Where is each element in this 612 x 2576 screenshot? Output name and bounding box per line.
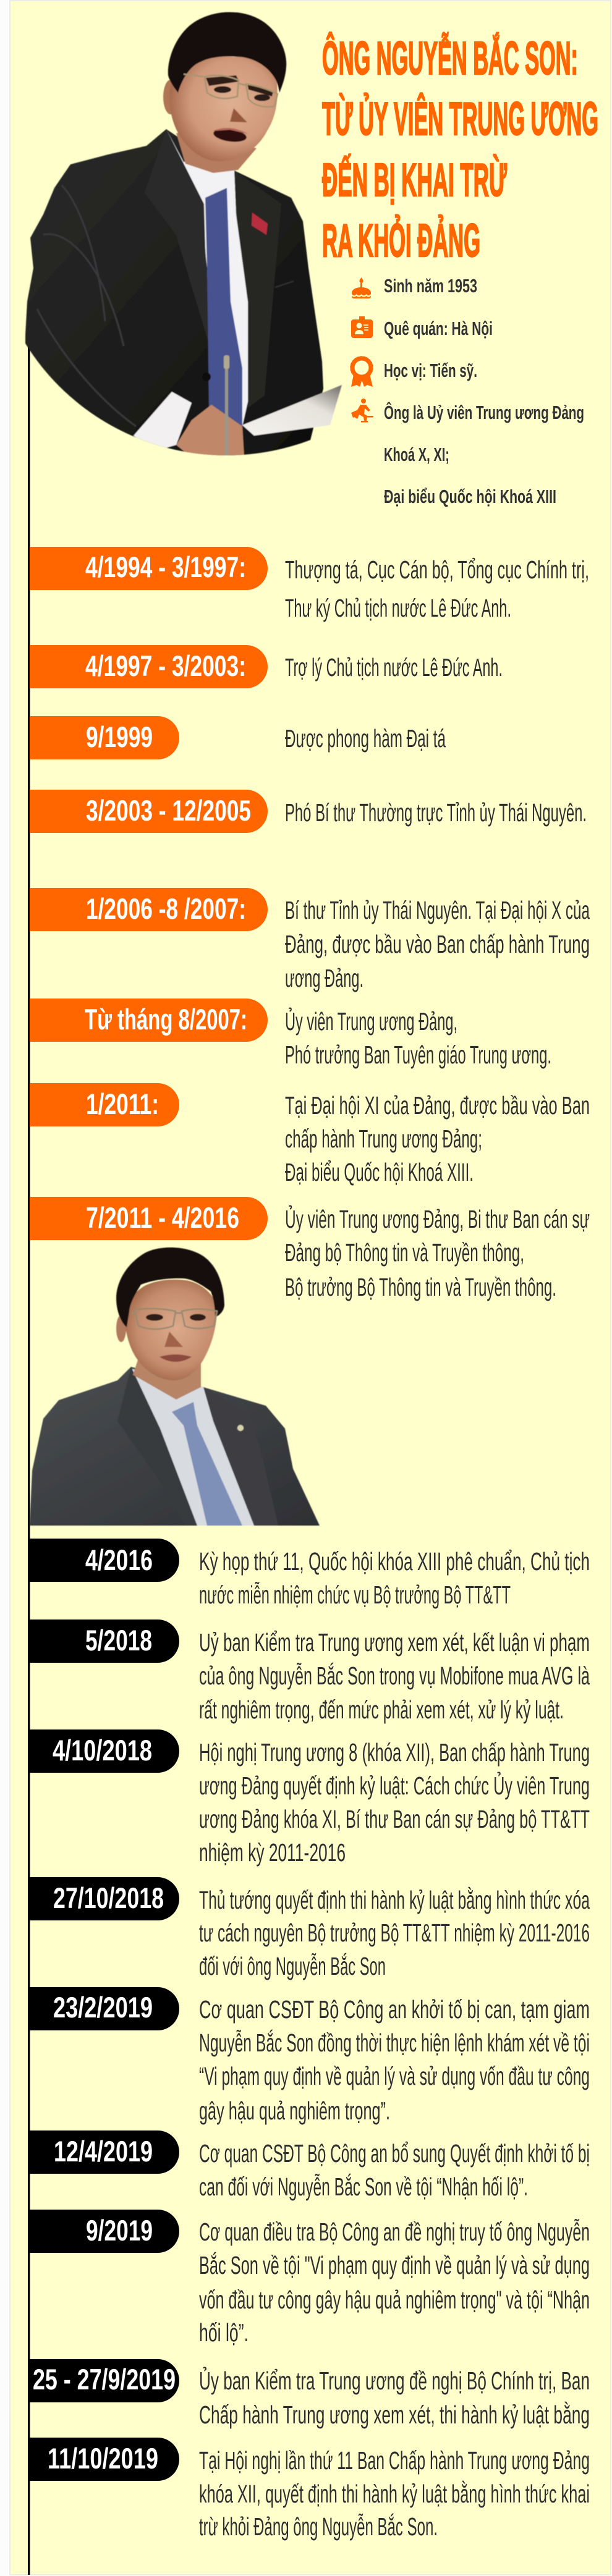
head <box>163 12 286 173</box>
timeline entry: 1/2006 - 8/2007: 1/2006 -8 /2007: <box>86 892 246 925</box>
timeline entry: 11/10/2019: 11/10/2019 <box>48 2442 158 2475</box>
timeline entry: 9/2019 <box>28 2210 590 2347</box>
timeline entry: 12/4/2019 <box>28 2130 590 2201</box>
timeline entry: 3/2003 - 12/2005: 3/2003 - 12/2005 <box>86 794 251 827</box>
portrait photo: speaking at podium <box>25 12 342 470</box>
timeline entry: 11/10/2019: trừ khỏi Đảng ông Nguyễn Bắc Son. <box>199 2512 438 2541</box>
title <box>322 32 598 266</box>
timeline entry: 5/2018 <box>28 1620 590 1724</box>
timeline entry: 4/2016 <box>28 1539 590 1609</box>
paper held in hand <box>242 385 342 436</box>
timeline entry: 27/10/2018: đối với ông Nguyễn Bắc Son <box>199 1952 386 1980</box>
timeline entry: 27/10/2018: 27/10/2018 <box>53 1881 164 1914</box>
timeline entry: 4/1997 - 3/2003 <box>30 645 503 688</box>
timeline entry: 5/2018: 5/2018 <box>85 1624 152 1657</box>
timeline entry: 23/2/2019: 23/2/2019 <box>53 1991 153 2024</box>
party badge <box>252 213 268 235</box>
timeline entry: 1/2011: chấp hành Trung ương Đảng; <box>285 1125 482 1153</box>
timeline entry: 9/1999: Được phong hàm Đại tá <box>285 724 446 753</box>
timeline entry: 7/2011 - 4/2016: 7/2011 - 4/2016 <box>86 1201 239 1234</box>
timeline vertical line <box>28 335 30 2575</box>
timeline entry: 12/4/2019: 12/4/2019 <box>54 2135 153 2168</box>
icon: birthday cake <box>352 277 371 298</box>
timeline entry: 4/1997 - 3/2003: 4/1997 - 3/2003: <box>85 649 246 682</box>
timeline entry: 1/2011 <box>30 1083 590 1186</box>
timeline entry: 1/2006 - 8/2007 <box>30 888 590 992</box>
timeline entry: 27/10/2018 <box>28 1877 590 1980</box>
timeline entry: 9/1999 <box>30 716 446 759</box>
icon: medal rosette <box>351 357 373 387</box>
timeline entry: 25 - 27/9/2019: 25 - 27/9/2019 <box>33 2363 176 2396</box>
timeline entry: 7/2011 - 4/2016 <box>30 1197 590 1301</box>
timeline entry: 3/2003 - 12/2005 <box>30 790 587 833</box>
personal info text <box>384 275 584 507</box>
timeline entry: 4/2016: 4/2016 <box>85 1543 153 1576</box>
timeline entry: 11/10/2019 <box>28 2438 590 2541</box>
timeline entry: từ tháng 8/2007: Từ tháng 8/2007: <box>85 1003 247 1036</box>
timeline entry: 9/2019: 9/2019 <box>86 2214 153 2247</box>
timeline entry: 4/10/2018 <box>28 1729 590 1867</box>
timeline entry: 1/2006 - 8/2007: ương Đảng. <box>285 964 363 992</box>
timeline entry: từ tháng 8/2007 <box>30 999 551 1069</box>
timeline entry: 25 - 27/9/2019 <box>28 2359 590 2429</box>
personal info text: Học vị: Tiến sỹ. <box>384 360 477 381</box>
personal info text: Khoá X, XI; <box>384 444 449 465</box>
icon: climbing man with briefcase <box>351 399 373 423</box>
icon: identity card <box>351 316 373 338</box>
timeline entry: 4/1994 - 3/1997: 4/1994 - 3/1997: <box>85 551 246 583</box>
personal info text: Sinh năm 1953 <box>384 275 477 297</box>
timeline entry: 9/1999: 9/1999 <box>86 720 153 753</box>
timeline entry: 9/2019: hối lộ”. <box>199 2318 249 2347</box>
timeline entry: từ tháng 8/2007: Ủy viên Trung ương Đảng, <box>285 1007 457 1036</box>
timeline entry: 4/1994 - 3/1997 <box>30 547 589 622</box>
portrait photo: seated minister <box>30 1248 320 1526</box>
timeline entry: 23/2/2019 <box>28 1987 590 2125</box>
timeline entry: 4/10/2018: nhiệm kỳ 2011-2016 <box>199 1838 346 1867</box>
timeline entry: 1/2011: 1/2011: <box>86 1087 159 1120</box>
timeline entry: 23/2/2019: gây hậu quả nghiêm trọng”. <box>199 2097 390 2125</box>
personal info text: Quê quán: Hà Nội <box>384 318 493 339</box>
head <box>116 1248 224 1400</box>
timeline entry: 1/2011: Đại biểu Quốc hội Khoá XIII. <box>285 1158 474 1186</box>
timeline entry: 4/10/2018: 4/10/2018 <box>53 1734 152 1767</box>
